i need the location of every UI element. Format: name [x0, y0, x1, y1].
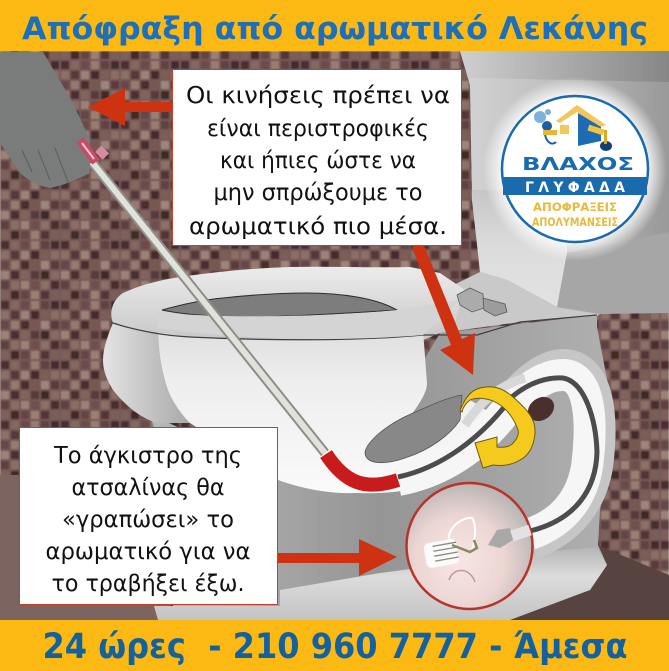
snake cable [398, 378, 597, 531]
title: Απόφραξη από αρωματικό Λεκάνης [22, 11, 648, 47]
callout: rotating motion [172, 70, 462, 246]
red arrow to hand [88, 88, 172, 126]
footer contact: 24 ώρες - 210 960 7777 - Άμεσα [42, 627, 628, 667]
rim right part [423, 272, 600, 340]
toilet body [150, 315, 612, 620]
trap upper pipe [465, 378, 525, 425]
detail circle [406, 483, 532, 609]
callout: hook: ατσαλίνας θα [72, 475, 224, 501]
outer bowl [103, 323, 190, 423]
floor right [500, 545, 669, 620]
inner bowl [158, 320, 513, 493]
toilet tank [460, 51, 669, 314]
floor left [0, 475, 170, 620]
footer bar [0, 620, 669, 671]
logo badge: ΑΠΟΦΡΑΞΕΙΣ [533, 200, 617, 214]
callout: rotating motion: μην σπρώξουμε το [214, 180, 422, 206]
header bar [0, 0, 669, 51]
trap pipe white band [398, 375, 590, 534]
callout: hook: αρωματικό για να [46, 539, 250, 565]
base foot of toilet [154, 547, 607, 620]
logo house [534, 105, 612, 151]
logo badge: ΓΛΥΦΑΔΑ [525, 180, 625, 196]
logo badge [483, 77, 667, 261]
pink handle grip [80, 140, 109, 162]
trap pipe halo [505, 369, 596, 540]
callout: hook: Το άγκιστρο της [53, 443, 242, 469]
callout: rotating motion: είναι περιστροφικές [207, 116, 429, 142]
yellow rotation arrow [460, 387, 535, 468]
glove hand [0, 52, 90, 188]
callout: hook: «γραπώσει» το [62, 507, 234, 533]
back opening of trap [523, 392, 559, 426]
red hook sleeve [326, 454, 398, 485]
callout: rotating motion: αρωματικό πιο μέσα. [189, 214, 447, 240]
callout: rotating motion: Οι κινήσεις πρέπει να [186, 83, 450, 109]
toilet seat [111, 267, 597, 340]
red arrow to detail [277, 539, 397, 576]
callout: rotating motion: και ήπιες ώστε να [220, 148, 416, 174]
logo badge: ΑΠΟΛΥΜΑΝΣΕΙΣ [532, 215, 618, 229]
logo band [503, 177, 647, 195]
callout: hook [20, 428, 278, 604]
logo badge: ΒΛΑΧΟΣ [522, 154, 634, 175]
rod [92, 162, 325, 453]
drain water shape [365, 395, 462, 463]
callout: hook: το τραβήξει έξω. [52, 571, 244, 597]
red arrow to bowl [412, 243, 475, 375]
